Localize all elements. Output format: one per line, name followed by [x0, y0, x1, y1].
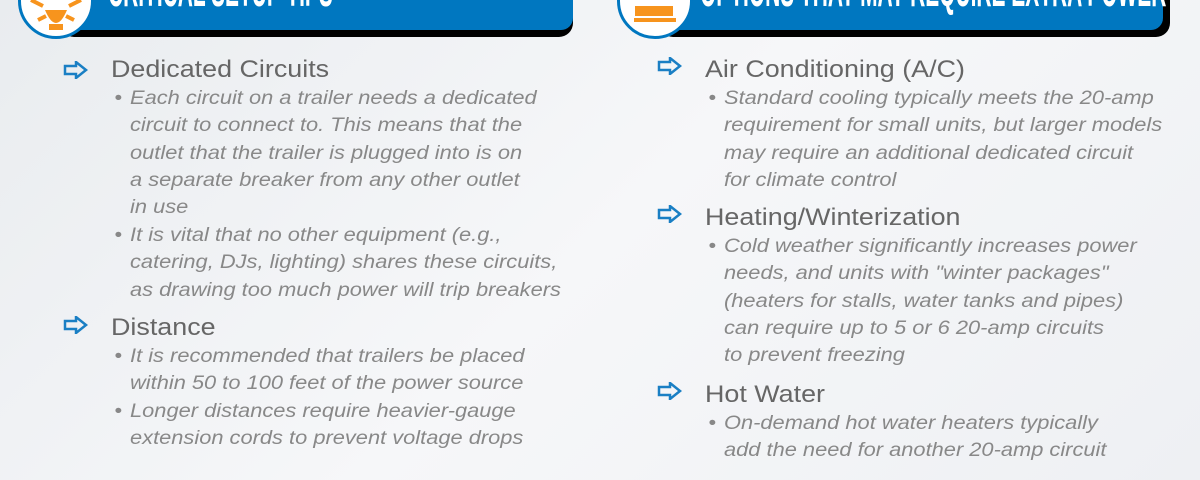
panel: left tips: as drawing too much power will trip breakers: [130, 279, 561, 301]
arrow icon: [658, 205, 682, 223]
arrow icon: [658, 57, 682, 75]
bullets: dedicated circuits: circuit to connect to. This means that the: [130, 114, 522, 136]
bullets: dedicated circuits: in use: [130, 196, 188, 218]
panel: right options: •: [708, 87, 716, 109]
panel: right options: [658, 56, 1162, 461]
panel: left tips: •: [114, 87, 122, 109]
arrow icon: [658, 382, 682, 400]
bullets: hot water: [708, 412, 1108, 461]
bullets: hot water: add the need for another 20-amp circuit: [724, 439, 1106, 461]
bullets: A/C: may require an additional dedicated circuit: [724, 142, 1133, 164]
panel: right options: •: [708, 412, 716, 434]
panel: left tips: •: [114, 345, 122, 367]
panel: left tips: It is vital that no other equipment (e.g.,: [130, 224, 501, 246]
bullets: dedicated circuits: outlet that the trailer is plugged into is on: [130, 142, 522, 164]
heading: distance: Distance: [111, 314, 216, 341]
bullets: distance: within 50 to 100 feet of the power source: [130, 372, 523, 394]
bullets: distance: [114, 345, 526, 394]
panel: left tips: •: [114, 224, 122, 246]
bullets: A/C: [708, 87, 1162, 191]
bullets: heating: (heaters for stalls, water tanks and pipes): [724, 290, 1123, 312]
bullets: heating: [708, 235, 1138, 366]
bullets: A/C: for climate control: [724, 169, 896, 191]
heading: heating: Heating/Winterization: [705, 204, 960, 231]
bullets: heating: needs, and units with "winter packages": [724, 262, 1109, 284]
header: options requiring extra power: [617, 0, 1170, 39]
bullets: dedicated circuits: [114, 87, 538, 218]
panel: left tips: Longer distances require heavier-gauge: [130, 400, 516, 422]
bullets: distance: It is recommended that trailers be placed: [130, 345, 525, 367]
heading: dedicated circuits: Dedicated Circuits: [111, 56, 329, 83]
panel: left tips: •: [114, 400, 122, 422]
bullets: dedicated circuits: a separate breaker from any other outlet: [130, 169, 520, 191]
bullets: A/C: Standard cooling typically meets the 20-amp: [724, 87, 1154, 109]
icon: light bulb: [18, 0, 94, 39]
heading: air conditioning: Air Conditioning (A/C): [705, 56, 965, 83]
arrow icon: [64, 316, 88, 334]
panel: left tips: [64, 56, 561, 449]
panel: right options: •: [708, 235, 716, 257]
bullets: dedicated circuits: Each circuit on a trailer needs a dedicated: [130, 87, 537, 109]
bullets: heating: can require up to 5 or 6 20-amp circuits: [724, 317, 1104, 339]
header: critical setup tips: [18, 0, 573, 39]
bullets: heating: Cold weather significantly increases power: [724, 235, 1137, 257]
panel: left tips: extension cords to prevent voltage drops: [130, 427, 523, 449]
bullets: A/C: requirement for small units, but larger models: [724, 114, 1162, 136]
heading: hot water: Hot Water: [705, 381, 825, 408]
bullets: heating: to prevent freezing: [724, 344, 905, 366]
icon: trailer unit: [617, 0, 693, 39]
panel: left tips: catering, DJs, lighting) shares these circuits,: [130, 251, 557, 273]
bullets: hot water: On-demand hot water heaters typically: [724, 412, 1098, 434]
arrow icon: [64, 61, 88, 79]
